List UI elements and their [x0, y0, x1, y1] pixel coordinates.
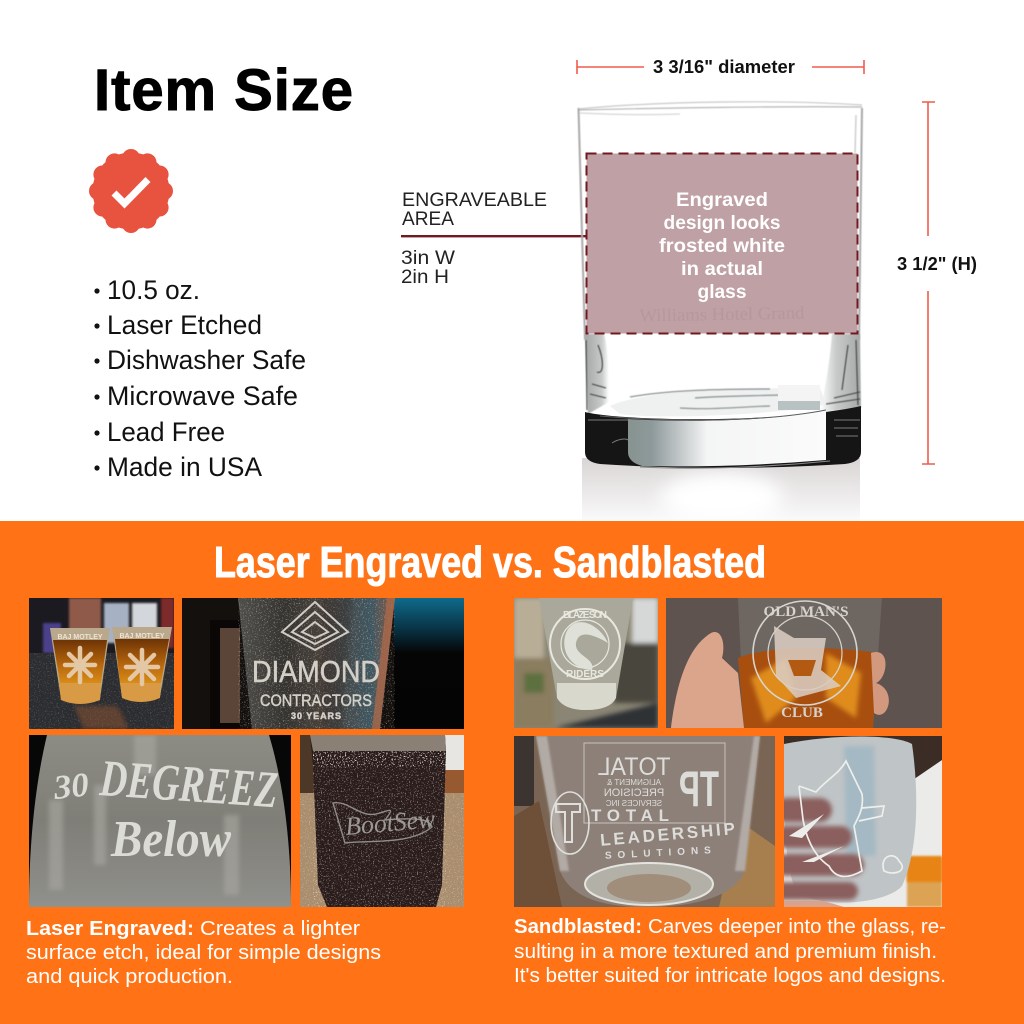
height dimension	[897, 102, 977, 464]
height dimension: 3 1/2" (H)	[897, 254, 977, 274]
caption: laser engraved: Creates a lighter	[200, 918, 360, 940]
photo: blaze shot glass: BLAZE SON	[563, 610, 607, 621]
engraveable area label: 2in H	[401, 267, 449, 288]
caption: laser engraved: and quick production.	[26, 966, 233, 988]
photo: total leadership glass: TP	[679, 761, 719, 817]
photo: amber shot glasses: BAJ MOTLEY	[57, 634, 103, 641]
engraving area box	[586, 154, 858, 334]
diamond logo	[282, 602, 348, 650]
feature list	[94, 275, 306, 482]
glass illustration	[578, 102, 862, 468]
engraving note: Engraved	[676, 190, 768, 211]
photo: total leadership glass: TOTAL	[597, 753, 670, 781]
photo: amber shot glasses	[29, 598, 174, 729]
photo: blaze shot glass	[514, 598, 658, 728]
right side band	[820, 334, 861, 412]
photo: diamond contractors glass	[182, 598, 464, 729]
caption: sandblasted	[514, 916, 946, 987]
caption: sandblasted: sulting in a more textured and premium finish.	[514, 941, 937, 963]
caption: laser engraved: surface etch, ideal for simple designs	[26, 942, 381, 964]
glass base centre	[628, 410, 826, 466]
feature list: 10.5 oz.	[107, 275, 200, 305]
engraveable area label: AREA	[402, 209, 454, 230]
photo: old man's club glass	[666, 598, 942, 728]
photo: diamond contractors glass: DIAMOND	[252, 654, 380, 689]
photo: 30 degreez below wine glass	[29, 735, 291, 907]
photo: diamond contractors glass: CONTRACTORS	[260, 691, 372, 710]
photo: boot glass with dark soda: BootSew	[344, 804, 437, 841]
caption: sandblasted: Sandblasted:	[514, 916, 642, 938]
photo: total leadership glass: SERVICES INC	[606, 799, 662, 808]
caption: sandblasted: Carves deeper into the glass, re-	[648, 916, 946, 938]
title: item size: Item Size	[94, 58, 353, 123]
engraving note: in actual	[681, 259, 763, 280]
heading: laser engraved vs sandblasted: Laser Engraved vs. Sandblasted	[214, 538, 766, 587]
engraveable area label	[401, 190, 587, 288]
feature list: Dishwasher Safe	[107, 345, 306, 375]
engraveable area label: 3in W	[401, 248, 455, 269]
diameter dimension	[577, 57, 864, 77]
photo: old man's club glass: OLD MAN'S	[764, 604, 848, 620]
engraving note: design looks	[664, 213, 780, 234]
glass base	[585, 406, 861, 468]
engraving note	[659, 190, 785, 303]
photo: total leadership glass: SOLUTIONS	[605, 845, 711, 862]
photo: old man's club glass: CLUB	[781, 705, 823, 721]
engraving note: glass	[698, 282, 746, 303]
feature list: Microwave Safe	[107, 381, 298, 411]
photo: 30 degreez below wine glass: Below	[110, 811, 231, 868]
photo: boot glass with dark soda	[300, 735, 464, 907]
orange panel	[0, 521, 1024, 1024]
photo: 30 degreez below wine glass: 30	[51, 767, 91, 807]
photo: total leadership glass: PRECISION	[604, 787, 664, 799]
caption: laser engraved	[26, 918, 381, 988]
feature list: Lead Free	[107, 417, 225, 447]
caption: sandblasted: It's better suited for intricate logos and designs.	[514, 965, 946, 987]
engraving note: frosted white	[659, 236, 785, 257]
feature list: Laser Etched	[107, 310, 262, 340]
icon: check badge	[89, 149, 173, 233]
rim and walls	[578, 102, 862, 340]
feature list: Made in USA	[107, 452, 262, 482]
photo: amber shot glasses: BAJ MOTLEY	[119, 633, 165, 640]
photo: blaze shot glass: RIDERS	[566, 669, 604, 680]
left side band	[585, 334, 609, 414]
hand fingers	[774, 798, 864, 900]
photo: total leadership glass	[514, 736, 775, 907]
photo: cat on stemless glass	[784, 736, 942, 907]
engraveable area label: ENGRAVEABLE	[402, 190, 547, 211]
faint etched text: Williams Hotel Grand	[639, 303, 805, 325]
glass reflection	[582, 458, 860, 524]
inner ellipse base	[610, 388, 826, 416]
photo: total leadership glass: TOTAL	[591, 806, 669, 825]
photo: total leadership glass: ALIGNMENT &	[606, 778, 661, 787]
photo: total leadership glass: LEADERSHIP	[599, 819, 736, 850]
caption: laser engraved: Laser Engraved:	[26, 918, 194, 940]
diameter dimension: 3 3/16" diameter	[653, 57, 795, 77]
photo: diamond contractors glass: 30 YEARS	[291, 711, 341, 721]
